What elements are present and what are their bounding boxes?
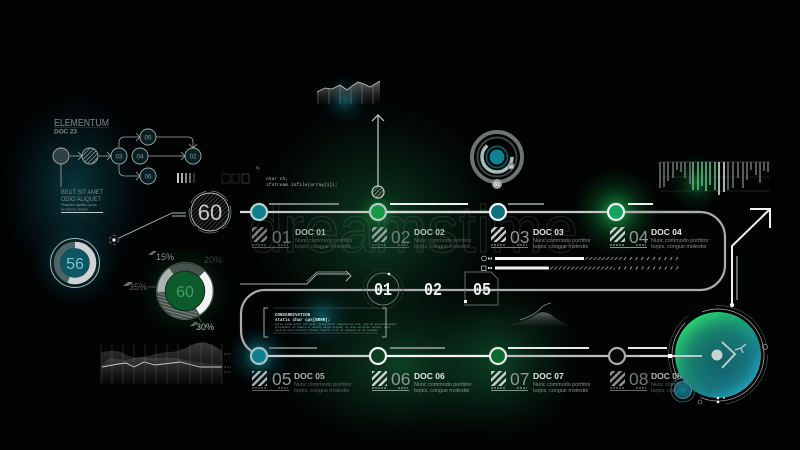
step 03: turpis, congue molestie bbox=[533, 244, 588, 250]
step 08 bbox=[610, 369, 709, 394]
gauge 60 with leader bbox=[110, 191, 251, 244]
label: gauge value 61: 61 bbox=[494, 182, 500, 188]
step 07 bbox=[491, 369, 591, 394]
counter 01 02 05: 01 bbox=[374, 281, 392, 301]
percent labels: 20% bbox=[204, 255, 222, 265]
step 04: turpis, congue molestie bbox=[651, 244, 706, 250]
percent labels: 35% bbox=[129, 282, 147, 292]
flow node labels bbox=[115, 134, 197, 180]
code box panel bbox=[264, 308, 397, 337]
code snippet: $; bbox=[256, 166, 261, 171]
up arrow from node bbox=[372, 115, 384, 198]
step 02: DOC 02 bbox=[414, 227, 445, 237]
step 04: 04 bbox=[629, 227, 649, 247]
step 02: Nunc commodo porttitor bbox=[414, 238, 472, 244]
code box panel: CONSARRIVATION bbox=[275, 314, 311, 318]
sphere hub bbox=[640, 303, 770, 407]
step 08: 08 bbox=[629, 369, 648, 389]
step 03 bbox=[491, 227, 591, 250]
flow node labels: 06 bbox=[144, 174, 152, 180]
percent labels: 30% bbox=[196, 322, 214, 332]
step 08: DOC 08 bbox=[651, 371, 682, 381]
step 04: DOC 04 bbox=[651, 227, 682, 237]
step 06: turpis, congue molestie bbox=[414, 388, 469, 394]
flow caption: Phasellus dapibus, purus bbox=[61, 203, 97, 207]
step 04: Nunc commodo porttitor bbox=[651, 238, 709, 244]
step 08: turpis, congue molestie bbox=[651, 388, 706, 394]
step 05: turpis, congue molestie bbox=[294, 388, 349, 394]
step 07: 07 bbox=[510, 369, 529, 389]
donut gauge 56: 56 bbox=[66, 256, 84, 273]
counter 01 02 05: 05 bbox=[473, 281, 491, 301]
label: gauge value 66: 66 bbox=[509, 164, 514, 169]
donut gauge 60 with percent labels: 60 bbox=[176, 284, 194, 301]
step 08: Nunc commodo porttitor bbox=[651, 382, 709, 388]
large arrow bbox=[730, 209, 770, 307]
step 06 bbox=[372, 369, 472, 394]
step 01: Nunc commodo porttitor bbox=[295, 238, 353, 244]
flow node labels: 03 bbox=[115, 154, 123, 160]
step 05: 05 bbox=[272, 369, 291, 389]
title: ELEMENTUM bbox=[54, 118, 109, 136]
step 05 bbox=[252, 369, 352, 394]
progress bars bbox=[482, 256, 679, 270]
hub connector bbox=[640, 355, 702, 357]
flow nodes bbox=[53, 129, 201, 184]
step 04 bbox=[610, 227, 709, 250]
flow caption: ODIO ALIQUET bbox=[61, 197, 101, 203]
step 03: DOC 03 bbox=[533, 227, 564, 237]
watermark: dreamstime bbox=[248, 192, 578, 266]
step 02: 02 bbox=[391, 227, 410, 247]
code box panel: Lorem ipsum dolor sit amet, consectetur adipiscing elit, sed do eiusmod tempor bbox=[275, 322, 397, 326]
step 02: turpis, congue molestie bbox=[414, 244, 469, 250]
step 01: DOC 01 bbox=[295, 227, 326, 237]
flow caption: leo dictum, semper bbox=[61, 208, 89, 212]
step 03: Nunc commodo porttitor bbox=[533, 238, 591, 244]
step 01: 01 bbox=[272, 227, 291, 247]
step 07: Nunc commodo porttitor bbox=[533, 382, 591, 388]
hub markers bbox=[717, 397, 725, 403]
concentric radial gauge bbox=[472, 132, 522, 189]
bar histogram top right bbox=[660, 162, 770, 195]
percent labels: 15% bbox=[156, 252, 174, 262]
hub rings bbox=[668, 306, 768, 404]
flow node labels: 02 bbox=[189, 154, 197, 160]
title: ELEMENTUM: DOC 23 bbox=[54, 128, 77, 136]
flow caption bbox=[61, 190, 103, 212]
small satellite circle bbox=[669, 376, 697, 404]
timeline path bbox=[240, 212, 725, 356]
flow node labels: 05 bbox=[144, 134, 152, 142]
flow connectors bbox=[61, 133, 197, 187]
top area chart bbox=[317, 81, 380, 104]
fading bar strip bbox=[177, 173, 249, 183]
multi-series area chart bbox=[101, 343, 231, 385]
donut gauge 56 bbox=[50, 238, 100, 288]
code box panel: static char cps[BRRR]; bbox=[275, 318, 330, 323]
counter 01 02 05 bbox=[363, 269, 498, 309]
step 06: DOC 06 bbox=[414, 371, 445, 381]
code snippet bbox=[242, 166, 338, 188]
flow node labels: 04 bbox=[136, 154, 144, 160]
title: ELEMENTUM: ELEMENTUM bbox=[54, 118, 109, 129]
code box panel: incididunt ut labore et dolore magna aliqua, ut enim ad minim veniam, quis bbox=[275, 325, 391, 329]
step 03: 03 bbox=[510, 227, 529, 247]
element flow diagram bbox=[53, 118, 201, 212]
step 02 bbox=[372, 227, 472, 250]
hub chevron icon bbox=[722, 342, 746, 368]
code snippet: ifstream infile(array[1]); bbox=[266, 182, 338, 188]
code snippet: char ch; bbox=[266, 176, 288, 182]
background glows bbox=[0, 74, 727, 449]
percent labels bbox=[129, 252, 222, 332]
connector arrow bbox=[240, 271, 351, 284]
gauge 60 with leader: 60 bbox=[198, 200, 222, 225]
accent bars above the timeline bbox=[269, 204, 667, 348]
step 06: 06 bbox=[391, 369, 410, 389]
step 06: Nunc commodo porttitor bbox=[414, 382, 472, 388]
step 01: turpis, congue molestie bbox=[295, 244, 350, 250]
donut gauge 60 with percent labels bbox=[123, 251, 222, 332]
code box panel: nostrud exercitation ullamco laboris nisi ut aliquip ex ea commodo bbox=[275, 328, 378, 332]
step 07: DOC 07 bbox=[533, 371, 564, 381]
step 05: DOC 05 bbox=[294, 371, 325, 381]
step 05: Nunc commodo porttitor bbox=[294, 382, 352, 388]
step 07: turpis, congue molestie bbox=[533, 388, 588, 394]
counter 01 02 05: 02 bbox=[424, 281, 442, 301]
step 01 bbox=[252, 227, 353, 250]
timeline nodes bbox=[251, 204, 625, 364]
mountain chart bbox=[506, 303, 571, 327]
flow caption: BEUT SIT AMET bbox=[61, 190, 103, 196]
